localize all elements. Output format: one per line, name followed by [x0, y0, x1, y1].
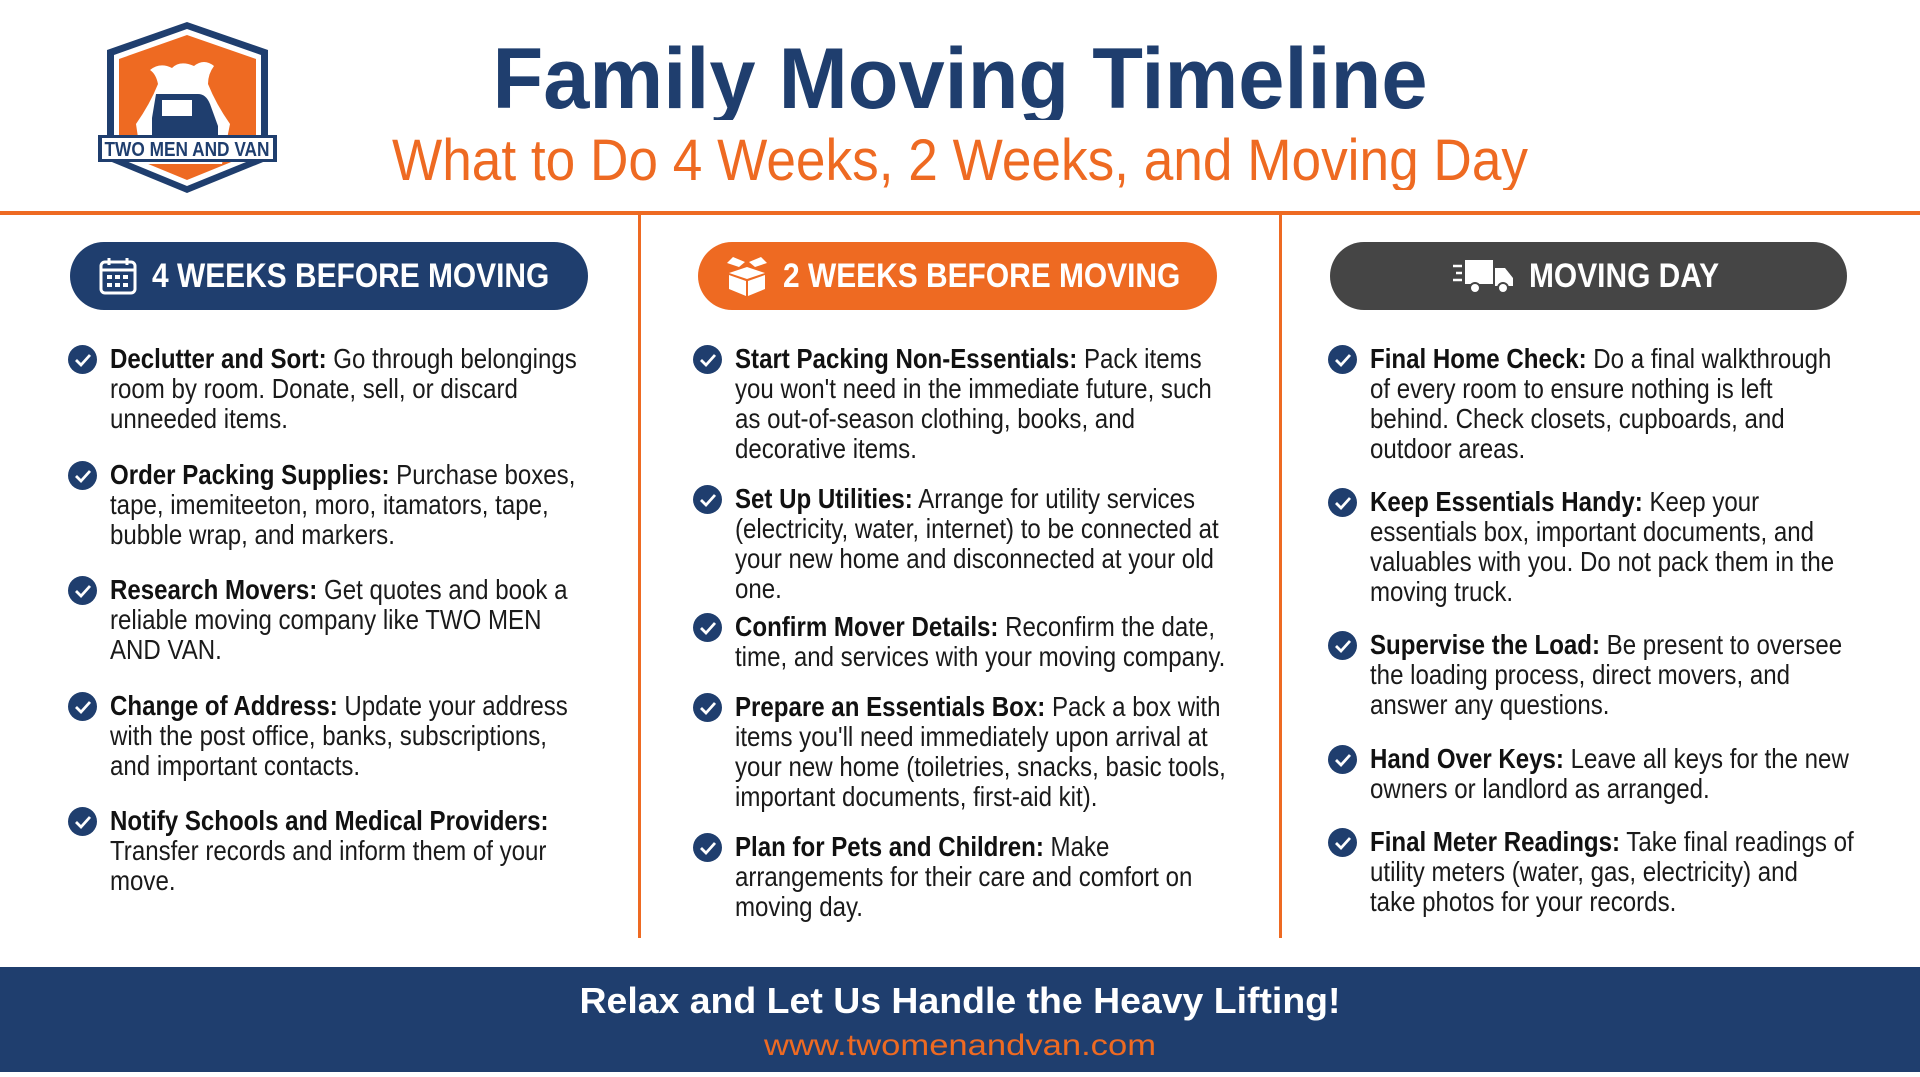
item: keys — [1328, 743, 1849, 804]
item: home check: Final Home Check: Do a final walkthrough — [1370, 343, 1831, 374]
item: utilities: your new home and disconnected at your old — [735, 543, 1214, 574]
item: pets: arrangements for their care and comfort on — [735, 861, 1192, 892]
item: confirm: time, and services with your moving company. — [735, 641, 1225, 672]
item: packing: as out-of-season clothing, books, and — [735, 403, 1135, 434]
item: address: with the post office, banks, subscriptions, — [110, 720, 547, 751]
item: supplies: Order Packing Supplies: Purchase boxes, — [110, 459, 575, 490]
item: schools: Transfer records and inform them of your — [110, 835, 546, 866]
item: essentials handy: moving truck. — [1370, 576, 1513, 607]
item: utilities: Set Up Utilities: Arrange for utility services — [735, 483, 1195, 514]
item: essentials box: important documents, first-aid kit). — [735, 781, 1097, 812]
item: pets: moving day. — [735, 891, 863, 922]
item: utilities — [693, 483, 1219, 604]
item: pets — [693, 831, 1192, 922]
item: supervise — [1328, 629, 1842, 720]
item: keys: Hand Over Keys: Leave all keys for the new — [1370, 743, 1849, 774]
item: packing: you won't need in the immediate future, such — [735, 373, 1212, 404]
item: supplies — [68, 459, 575, 550]
item: supervise: Supervise the Load: Be present to oversee — [1370, 629, 1842, 660]
item: supervise: the loading process, direct movers, and — [1370, 659, 1790, 690]
item: packing — [693, 343, 1212, 464]
item: supplies: tape, imemiteeton, moro, itamators, tape, — [110, 489, 549, 520]
item: supplies: bubble wrap, and markers. — [110, 519, 395, 550]
item: meters: take photos for your records. — [1370, 886, 1676, 917]
item: address: and important contacts. — [110, 750, 360, 781]
item: research: AND VAN. — [110, 634, 222, 665]
item: meters: Final Meter Readings: Take final readings of — [1370, 826, 1854, 857]
item: essentials box: items you'll need immediately upon arrival at — [735, 721, 1208, 752]
item: declutter: unneeded items. — [110, 403, 288, 434]
column 2 items — [693, 343, 1226, 922]
item: pets: Plan for Pets and Children: Make — [735, 831, 1109, 862]
item: home check: outdoor areas. — [1370, 433, 1525, 464]
item: declutter: room by room. Donate, sell, or discard — [110, 373, 518, 404]
pill: 4 weeks — [70, 242, 588, 310]
item: declutter — [68, 343, 577, 434]
item: address — [68, 690, 568, 781]
item: home check: of every room to ensure nothing is left — [1370, 373, 1773, 404]
pill: moving day: MOVING DAY — [1529, 256, 1720, 294]
item: confirm — [693, 611, 1225, 672]
item: schools: Notify Schools and Medical Providers: — [110, 805, 549, 836]
item: home check: behind. Check closets, cupboards, and — [1370, 403, 1785, 434]
item: packing: Start Packing Non-Essentials: Pack items — [735, 343, 1202, 374]
pill: moving day — [1330, 242, 1847, 310]
item: essentials handy: Keep Essentials Handy: Keep your — [1370, 486, 1759, 517]
item: home check — [1328, 343, 1831, 464]
pill: 4 weeks: 4 WEEKS BEFORE MOVING — [152, 256, 550, 294]
footer: www.twomenandvan.com — [763, 1029, 1156, 1062]
item: essentials box — [693, 691, 1226, 812]
item: essentials handy — [1328, 486, 1834, 607]
item: research: reliable moving company like TWO MEN — [110, 604, 541, 635]
footer — [0, 967, 1920, 1072]
item: supervise: answer any questions. — [1370, 689, 1609, 720]
item: essentials box: your new home (toiletries, snacks, basic tools, — [735, 751, 1226, 782]
pill: 2 weeks — [698, 242, 1217, 310]
item: research: Research Movers: Get quotes and book a — [110, 574, 567, 605]
item: essentials box: Prepare an Essentials Box: Pack a box with — [735, 691, 1220, 722]
item: utilities: one. — [735, 573, 782, 604]
logo — [98, 22, 277, 193]
pill: 2 weeks: 2 WEEKS BEFORE MOVING — [783, 256, 1180, 294]
item: research — [68, 574, 568, 665]
item: schools: move. — [110, 865, 176, 896]
column 1 items — [68, 343, 577, 896]
column 3 items — [1328, 343, 1854, 917]
item: keys: owners or landlord as arranged. — [1370, 773, 1710, 804]
item: packing: decorative items. — [735, 433, 917, 464]
item: meters: utility meters (water, gas, electricity) and — [1370, 856, 1798, 887]
item: essentials handy: valuables with you. Do not pack them in the — [1370, 546, 1834, 577]
item: meters — [1328, 826, 1854, 917]
item: declutter: Declutter and Sort: Go through belongings — [110, 343, 577, 374]
item: essentials handy: essentials box, important documents, and — [1370, 516, 1814, 547]
item: address: Change of Address: Update your address — [110, 690, 568, 721]
item: confirm: Confirm Mover Details: Reconfirm the date, — [735, 611, 1215, 642]
item: schools — [68, 805, 549, 896]
item: utilities: (electricity, water, internet) to be connected at — [735, 513, 1219, 544]
footer: Relax and Let Us Handle the Heavy Lifting! — [580, 980, 1340, 1021]
